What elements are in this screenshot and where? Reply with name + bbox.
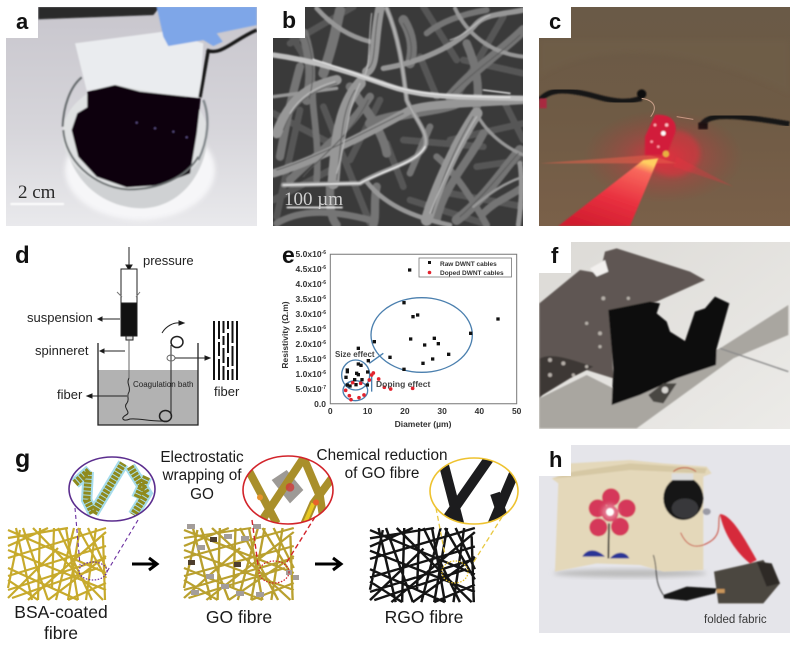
electrostatic wrapping caption: wrapping of	[161, 467, 242, 484]
arrow 1	[132, 558, 157, 570]
panel h: textile circuit photo	[539, 445, 790, 633]
x axis ticks: 10	[363, 406, 373, 416]
label c: c	[549, 9, 561, 34]
label e: e	[282, 242, 295, 268]
pressure label: pressure	[143, 253, 194, 268]
panel f: fabric photo	[539, 242, 790, 429]
y axis ticks: 1.0x10	[296, 369, 322, 379]
scale bar label: 2 cm: 2 cm	[18, 182, 56, 203]
x axis title: Diameter (µm)	[395, 419, 452, 429]
syringe	[117, 247, 140, 378]
arrows	[87, 317, 210, 398]
chemical reduction caption: Chemical reduction	[317, 447, 447, 464]
aligned fiber microstructure	[214, 321, 237, 380]
panel g: GO fibre fabrication scheme	[8, 445, 518, 643]
size effect note: Size effect	[335, 350, 375, 359]
label b	[273, 7, 305, 38]
y axis ticks: -6	[322, 265, 326, 271]
plot frame	[330, 254, 517, 404]
legend	[419, 258, 512, 277]
data and annotations	[342, 270, 498, 401]
fiber label right: fiber	[214, 384, 240, 399]
label c	[539, 7, 571, 38]
y axis ticks: -6	[322, 325, 326, 331]
y axis ticks: 5.0x10	[296, 384, 322, 394]
y axis title: Resistivity (Ω.m)	[280, 301, 290, 369]
label d: d	[15, 242, 30, 269]
y axis ticks: -6	[322, 355, 326, 361]
RGO fibre caption: RGO fibre	[385, 607, 463, 627]
label a: a	[16, 9, 29, 34]
GO fibre mesh	[184, 528, 294, 600]
panel d: wet spinning schematic	[15, 242, 240, 425]
panel a: photo of fabric in beaker	[6, 7, 257, 226]
label h: h	[549, 447, 562, 472]
spinneret label: spinneret	[35, 343, 89, 358]
y axis ticks: -6	[322, 340, 326, 346]
doped DWNT points	[346, 373, 413, 400]
coagulation bath label: Coagulation bath	[133, 380, 194, 389]
electrostatic wrapping caption: Electrostatic	[160, 449, 244, 466]
electrostatic wrapping caption: GO	[190, 486, 214, 503]
label b: b	[282, 7, 296, 33]
y axis ticks: -6	[322, 295, 326, 301]
arrow 2	[315, 558, 341, 570]
label h	[539, 445, 571, 476]
panel b: SEM image of fibres	[273, 7, 523, 226]
GO sheets on mesh	[187, 524, 299, 597]
GO fibre caption: GO fibre	[206, 607, 272, 627]
BSA-coated fibre caption: BSA-coated	[14, 602, 108, 622]
x axis ticks: 30	[437, 406, 447, 416]
fiber label left: fiber	[57, 387, 83, 402]
y axis ticks: 3.0x10	[296, 309, 322, 319]
magnified circle: BSA fibres	[69, 457, 155, 580]
blue ellipses	[342, 298, 472, 401]
y axis ticks: 5.0x10	[296, 249, 322, 259]
panel e: resistivity scatter chart	[280, 242, 522, 429]
panel c: glowing red LED photo	[539, 7, 790, 226]
x axis ticks: 40	[475, 406, 484, 416]
x axis ticks: 50	[512, 406, 522, 416]
suspension label: suspension	[27, 310, 93, 325]
y axis ticks: -7	[322, 385, 326, 391]
y axis ticks: 3.5x10	[296, 294, 322, 304]
y axis ticks: -6	[322, 370, 326, 376]
fibre path and rollers	[123, 336, 183, 422]
legend: Doped DWNT cables	[440, 270, 504, 277]
x axis ticks	[328, 406, 522, 416]
RGO fibre mesh	[370, 528, 475, 602]
label a	[6, 7, 38, 38]
y axis ticks: 4.0x10	[296, 279, 322, 289]
y axis ticks: 1.5x10	[296, 354, 322, 364]
scale bar label: 100 µm: 100 µm	[284, 189, 343, 210]
y axis ticks: 0.0	[314, 399, 326, 409]
x axis ticks: 20	[400, 406, 410, 416]
y axis ticks: 2.5x10	[296, 324, 322, 334]
magnified circle: GO wrapped fibres	[243, 453, 337, 583]
y axis ticks: -6	[322, 250, 326, 256]
label f: f	[551, 243, 559, 268]
legend: Raw DWNT cables	[440, 261, 497, 268]
doping effect note: Doping effect	[376, 379, 430, 389]
raw DWNT points	[346, 270, 498, 386]
y axis ticks: 2.0x10	[296, 339, 322, 349]
BSA-coated fibre caption: fibre	[44, 623, 78, 643]
coagulation bath	[98, 343, 198, 425]
folded fabric caption: folded fabric	[704, 614, 767, 626]
y axis ticks	[296, 249, 326, 409]
label f	[539, 242, 571, 273]
y axis ticks: -6	[322, 280, 326, 286]
chemical reduction caption: of GO fibre	[345, 465, 419, 482]
magnified circle: RGO fibres	[430, 450, 518, 583]
BSA-coated fibre mesh	[8, 528, 106, 600]
y axis ticks: -6	[322, 310, 326, 316]
label g: g	[15, 445, 30, 473]
x axis ticks: 0	[328, 406, 333, 416]
y axis ticks: 4.5x10	[296, 264, 322, 274]
